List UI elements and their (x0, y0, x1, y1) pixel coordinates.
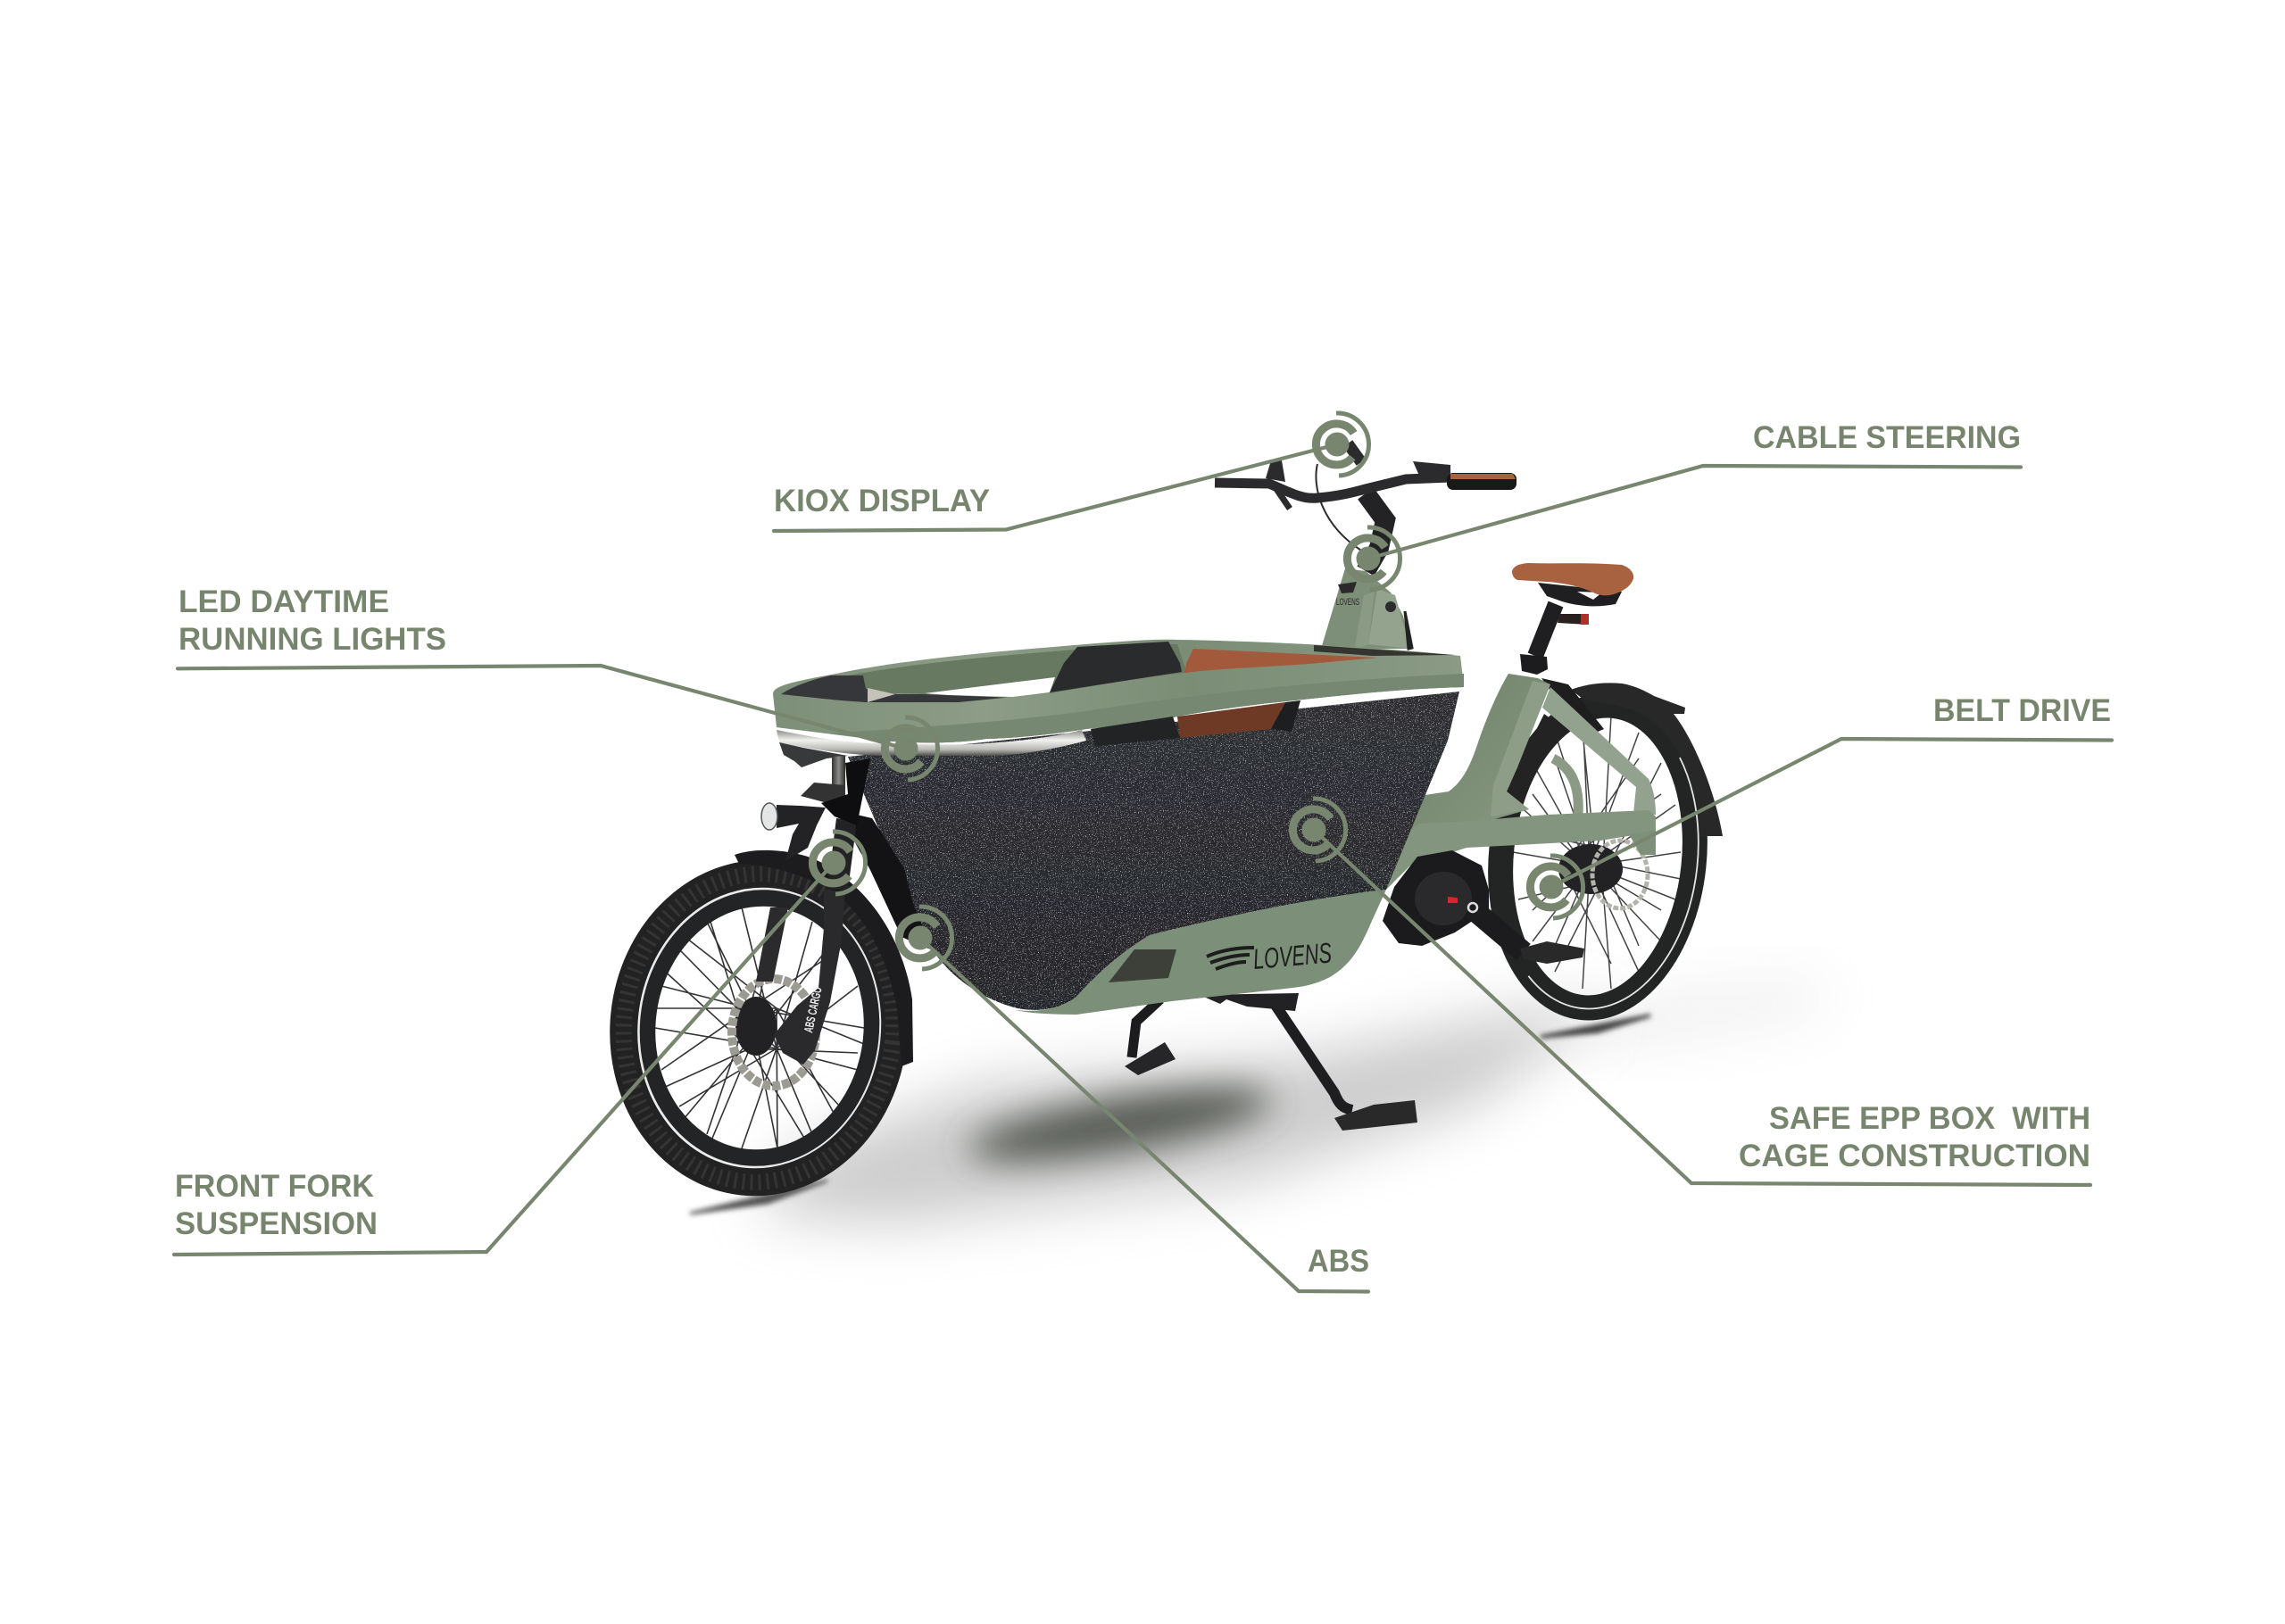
callout: KIOX display (774, 413, 1369, 531)
callout: cable steering: CABLE STEERING (1753, 420, 2021, 455)
window cut-outs below rim (1091, 700, 1300, 746)
callout: front fork suspension: FRONT FORK (175, 1169, 374, 1204)
callout: belt drive (1530, 693, 2112, 918)
cargo box body (848, 692, 1459, 1010)
box rim front band (777, 656, 1464, 742)
steering column: LOVENS (1336, 597, 1359, 608)
black panel beside box (845, 808, 933, 950)
callout: front fork suspension (174, 832, 866, 1255)
frame (1386, 674, 1656, 890)
box interior (781, 642, 1455, 703)
green box base with logo (1015, 890, 1386, 1015)
ground shadows (690, 982, 1821, 1224)
callout: ABS: ABS (1308, 1244, 1369, 1279)
callout: safe EPP box (1292, 799, 2090, 1185)
green box base with logo: LOVENS (1251, 936, 1333, 975)
front fender (735, 850, 913, 1066)
callout: LED daytime running lights: LED DAYTIME (179, 584, 389, 619)
front assembly (609, 756, 933, 1196)
callout: LED daytime running lights (178, 584, 938, 780)
mid motor and crank (1383, 850, 1584, 964)
cargo bike illustration (609, 443, 1723, 1196)
suspension fork: ABS CARGO (801, 985, 825, 1034)
box rim back (773, 640, 1464, 742)
rear wheel (1483, 694, 1713, 1019)
callout: safe EPP box: CAGE CONSTRUCTION (1739, 1139, 2090, 1173)
callout: belt drive: BELT DRIVE (1933, 693, 2111, 728)
front wheel (609, 860, 909, 1196)
rear mudguard (1541, 678, 1723, 836)
lower headlight housing (779, 742, 848, 767)
callout: safe EPP box: SAFE EPP BOX WITH (1769, 1101, 2090, 1136)
kickstands (1125, 993, 1417, 1131)
steering column (1321, 568, 1412, 651)
callout: cable steering (1347, 420, 2021, 590)
callout: LED daytime running lights: RUNNING LIGHTS (179, 622, 446, 657)
saddle and seat post (1512, 563, 1633, 675)
headlight (761, 803, 826, 861)
callout: front fork suspension: SUSPENSION (175, 1206, 378, 1241)
LED daytime running light (777, 730, 1086, 756)
callout: KIOX display: KIOX DISPLAY (774, 484, 990, 518)
suspension fork (774, 756, 870, 1065)
callout: ABS (899, 907, 1369, 1292)
handlebar and stem (1215, 443, 1516, 571)
